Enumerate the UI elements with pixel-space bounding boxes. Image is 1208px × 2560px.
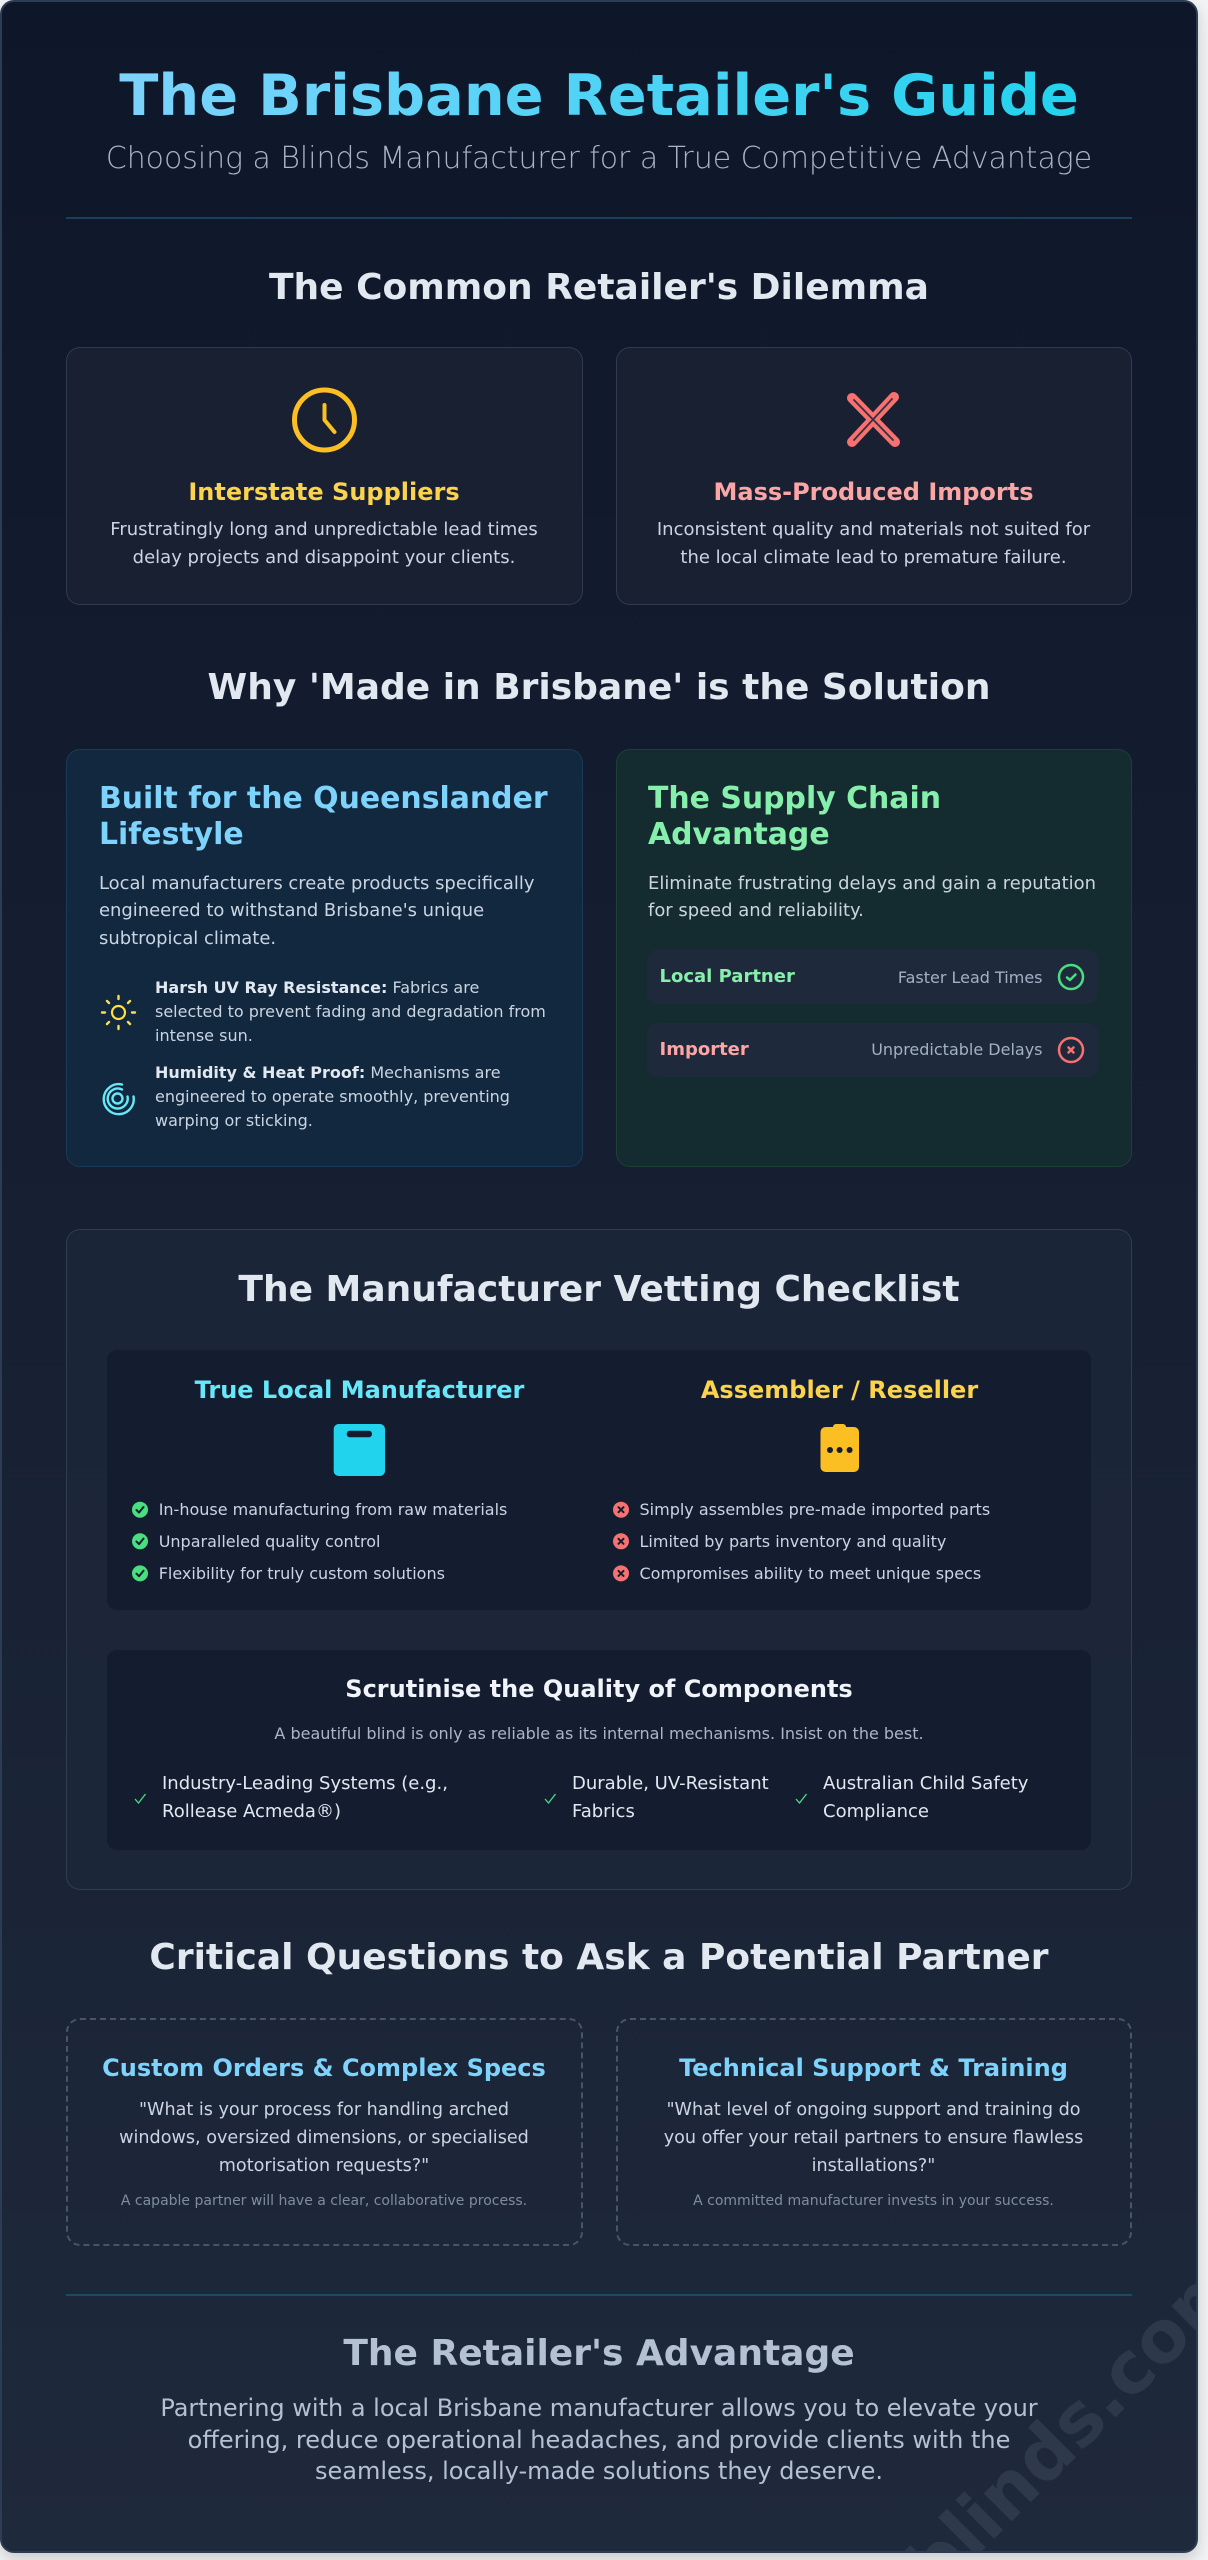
panel heading: Advantage — [648, 817, 830, 852]
divider — [66, 217, 1132, 219]
question: motorisation requests?" — [219, 2156, 429, 2176]
feature: uv: Harsh UV Ray Resistance: Fabrics are — [155, 978, 479, 997]
feature: humidity: Humidity & Heat Proof: Mechanisms are — [155, 1063, 501, 1082]
components box — [107, 1650, 1091, 1850]
panel: interstate suppliers — [66, 347, 582, 605]
card title: Interstate Suppliers — [188, 478, 460, 506]
list items: Limited by parts inventory and quality — [640, 1532, 946, 1551]
column title: True Local Manufacturer — [195, 1376, 524, 1404]
panel text: for speed and reliability. — [648, 900, 864, 921]
question — [664, 2100, 1083, 2176]
row: importer — [646, 1022, 1098, 1076]
panel text: engineered to withstand Brisbane's unique — [99, 900, 484, 921]
component 2: Durable, UV-Resistant — [572, 1773, 769, 1794]
heading: solution: Why 'Made in Brisbane' is the Solution — [208, 667, 990, 708]
heading: advantage: The Retailer's Advantage — [343, 2333, 855, 2374]
panel: technical support — [616, 2018, 1132, 2246]
icon: factory panel — [334, 1424, 385, 1476]
question — [119, 2100, 529, 2176]
component 3: Compliance — [823, 1801, 929, 1822]
feature: uv — [155, 978, 546, 1045]
icon: assembler — [820, 1424, 859, 1472]
question: windows, oversized dimensions, or specialised — [119, 2128, 529, 2148]
note: A capable partner will have a clear, collaborative process. — [121, 2193, 527, 2209]
card title: Custom Orders & Complex Specs — [102, 2054, 546, 2082]
box heading: Scrutinise the Quality of Components — [345, 1675, 853, 1703]
list items: Simply assembles pre-made imported parts — [640, 1500, 990, 1519]
panel heading: Lifestyle — [99, 817, 244, 852]
component 3: Australian Child Safety — [823, 1773, 1028, 1794]
panel: custom orders — [66, 2018, 582, 2246]
component 3 — [823, 1773, 1028, 1822]
conclusion: seamless, locally-made solutions they deserve. — [315, 2457, 883, 2485]
icon: spiral — [102, 1082, 135, 1116]
component 1 — [162, 1773, 448, 1822]
icon: x circle — [1058, 1036, 1084, 1064]
icon: check circle — [1058, 964, 1084, 990]
panel heading: Built for the Queenslander — [99, 781, 548, 816]
list items — [159, 1500, 507, 1583]
card title: Technical Support & Training — [679, 2054, 1068, 2082]
card text — [657, 518, 1090, 568]
card title: Mass-Produced Imports — [713, 478, 1034, 506]
question: "What is your process for handling arched — [139, 2100, 509, 2120]
panel text: subtropical climate. — [99, 928, 276, 949]
panel text — [99, 872, 534, 949]
subtitle: Choosing a Blinds Manufacturer for a True Competitive Advantage — [106, 141, 1092, 176]
panel heading — [99, 781, 548, 852]
icon: ticks — [134, 1794, 807, 1804]
question: installations?" — [812, 2156, 935, 2176]
feature: humidity: engineered to operate smoothly, preventing — [155, 1087, 510, 1106]
panel: supply chain — [616, 749, 1132, 1167]
crosses and list — [613, 1500, 990, 1583]
box text: A beautiful blind is only as reliable as its internal mechanisms. Insist on the best. — [274, 1724, 924, 1742]
card text: the local climate lead to premature failure. — [680, 547, 1067, 568]
conclusion — [160, 2394, 1038, 2485]
label: Local Partner — [660, 966, 795, 987]
label: Importer — [660, 1038, 749, 1060]
card text — [110, 518, 538, 568]
column: true local manufacturer — [132, 1376, 524, 1583]
comparison box — [107, 1350, 1091, 1610]
conclusion: offering, reduce operational headaches, and provide clients with the — [188, 2426, 1010, 2454]
heading: The Manufacturer Vetting Checklist — [238, 1269, 960, 1310]
icon: checks — [132, 1502, 148, 1582]
panel text — [648, 872, 1096, 921]
component 1: Industry-Leading Systems (e.g., — [162, 1773, 448, 1794]
feature: humidity — [155, 1063, 510, 1130]
value: Unpredictable Delays — [871, 1040, 1042, 1059]
column title: Assembler / Reseller — [701, 1376, 978, 1404]
note: A committed manufacturer invests in your success. — [693, 2193, 1054, 2209]
panel: mass-produced imports — [616, 347, 1132, 605]
icon: clock — [292, 388, 357, 452]
question: you offer your retail partners to ensure flawless — [664, 2128, 1083, 2148]
card text: Frustratingly long and unpredictable lead times — [110, 518, 538, 540]
row: local partner — [646, 950, 1098, 1004]
value: Faster Lead Times — [898, 968, 1042, 986]
heading: dilemma: The Common Retailer's Dilemma — [269, 266, 929, 308]
conclusion: Partnering with a local Brisbane manufacturer allows you to elevate your — [160, 2394, 1038, 2422]
component 2 — [572, 1773, 769, 1822]
divider — [66, 2294, 1132, 2296]
panel text: Eliminate frustrating delays and gain a reputation — [648, 872, 1096, 894]
card text: delay projects and disappoint your clients. — [133, 547, 515, 568]
list items: Flexibility for truly custom solutions — [159, 1564, 445, 1583]
heading: critical questions: Critical Questions to Ask a Potential Partner — [149, 1937, 1049, 1978]
card text: Inconsistent quality and materials not suited for — [657, 518, 1090, 540]
panel: vetting checklist — [66, 1229, 1132, 1890]
icon: sun — [100, 994, 136, 1030]
feature: uv: intense sun. — [155, 1026, 253, 1045]
feature: uv: selected to prevent fading and degradation from — [155, 1002, 546, 1021]
panel heading — [648, 781, 941, 852]
column: assembler reseller — [613, 1376, 990, 1583]
checklist — [132, 1500, 507, 1583]
list items: Compromises ability to meet unique specs — [640, 1564, 981, 1583]
list items: In-house manufacturing from raw materials — [159, 1500, 507, 1519]
panel text: Local manufacturers create products specifically — [99, 872, 534, 894]
feature: humidity: warping or sticking. — [155, 1111, 313, 1130]
panel heading: The Supply Chain — [648, 781, 941, 816]
list items: Unparalleled quality control — [159, 1532, 380, 1551]
component 2: Fabrics — [572, 1801, 635, 1822]
icon: crosses — [613, 1502, 629, 1582]
component 1: Rollease Acmeda®) — [162, 1801, 341, 1822]
title: The Brisbane Retailer's Guide — [119, 62, 1079, 128]
list items — [640, 1500, 990, 1583]
icon: x — [847, 392, 900, 447]
panel: queenslander lifestyle — [66, 749, 582, 1167]
question: "What level of ongoing support and training do — [666, 2100, 1081, 2120]
